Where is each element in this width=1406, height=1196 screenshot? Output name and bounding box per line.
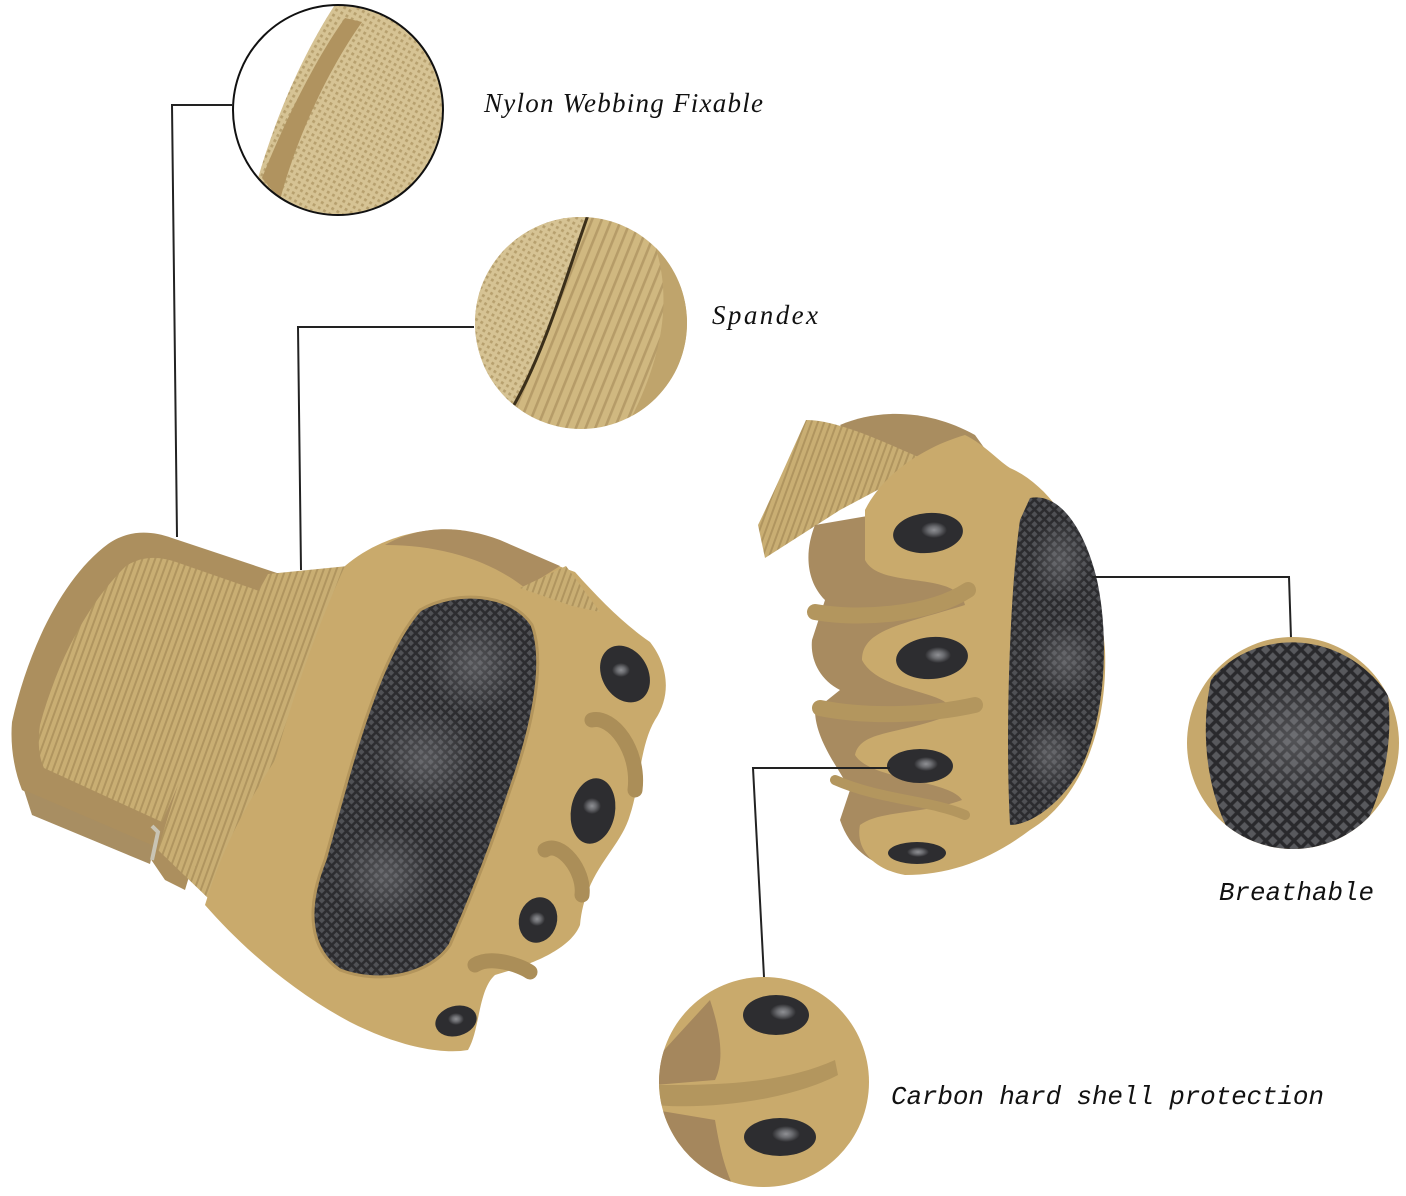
finger ridge webbing [520,566,600,612]
pad 4 centre [907,847,929,857]
pad 2 centre [925,647,951,663]
pad 1 centre [612,663,630,677]
callout circle: spandex [475,217,687,429]
cuff buckle strap [24,790,154,864]
leader line: nylon webbing [172,105,232,537]
knuckle pad 1 [891,510,965,556]
knuckle pad 3 [887,749,953,783]
callout circle: nylon webbing [232,4,444,216]
pad 3 centre [529,912,545,926]
finger ridge cords [475,720,636,972]
cuff strap [11,533,280,890]
knuckle pad 4 [888,842,946,864]
pad 1 centre [921,522,947,538]
finger fabric tips [808,500,980,870]
finger knuckle pad 3 [514,893,562,947]
callout circle: carbon hard shell [655,975,875,1190]
leader line: breathable [1092,577,1291,638]
wrist fabric behind knuckles [385,529,560,588]
finger knuckle pad 1 [590,637,660,711]
label: breathable: Breathable [1219,878,1374,908]
wrist spandex [158,566,348,900]
shell highlights [1020,520,1099,793]
carbon knuckle shell [313,597,538,977]
thumb webbing [758,420,930,558]
pad 2 centre [583,798,601,814]
leader line: carbon hard shell [753,768,890,977]
knuckle pad 2 [894,634,970,682]
knuckle highlights [333,615,523,925]
label: nylon webbing: Nylon Webbing Fixable [483,88,764,118]
cuff webbing panel [39,558,262,822]
left glove: fist with knuckle shell [11,529,666,1051]
main suede body [855,435,1105,875]
label: carbon hard shell protection: Carbon hard shell protection [891,1082,1324,1112]
right glove: front view [758,414,1105,875]
finger ridge cord 2 [820,705,975,714]
finger ridge cord 3 [835,780,965,815]
label: spandex: Spandex [712,300,819,330]
finger ridge cord 1 [815,590,968,616]
pad 4 centre [448,1013,464,1025]
finger knuckle pad 2 [566,775,620,847]
finger knuckle pad 4 [432,1001,480,1041]
callout circle: breathable [1185,635,1400,850]
leader line: spandex [298,327,474,570]
back of hand suede [205,529,666,1051]
wrist back section [840,414,1000,500]
pad 3 centre [914,757,938,771]
cuff buckle ring [152,826,158,860]
carbon knuckle shell [1008,497,1104,825]
